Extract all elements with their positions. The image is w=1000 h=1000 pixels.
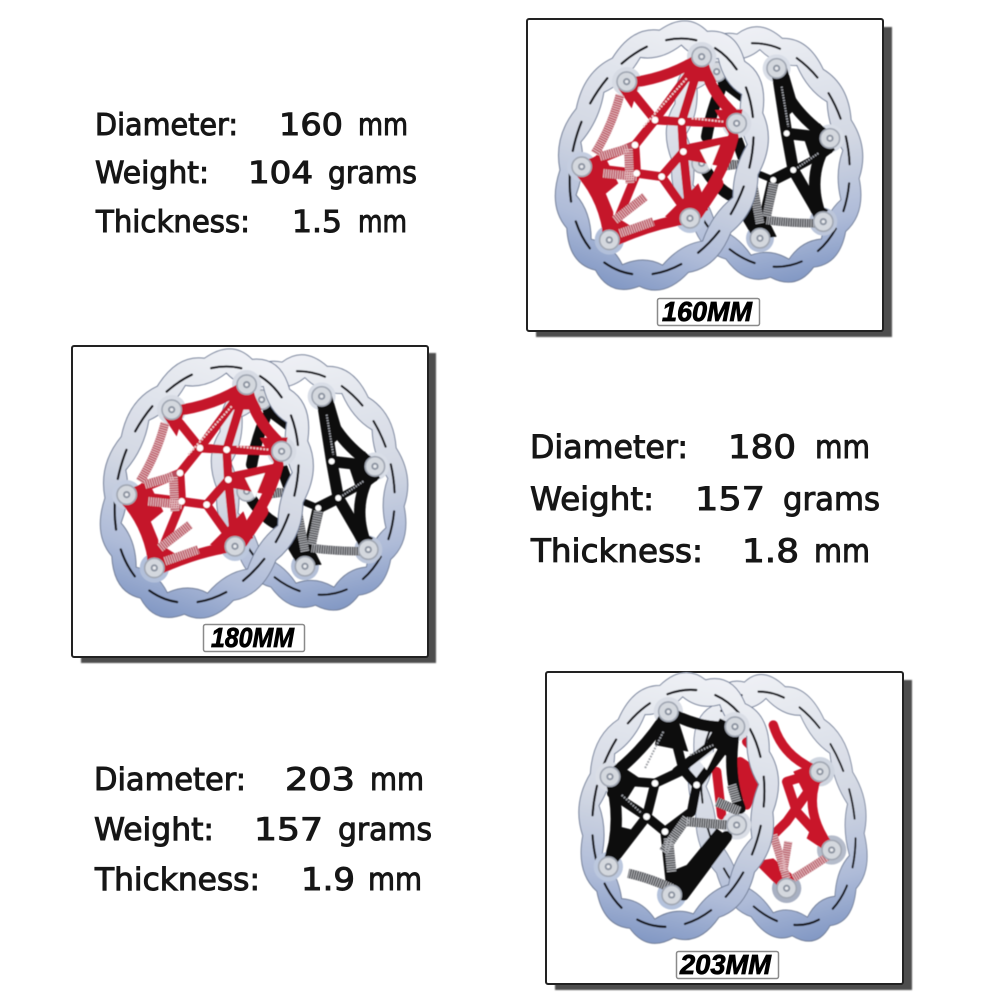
size label: 203MM: 203MM: [679, 949, 772, 980]
spec line: thickness 1.9 mm: [94, 862, 422, 898]
spec line: thickness 1.5 mm: mm: [358, 205, 407, 240]
spec line: diameter 160 mm: 160: [279, 108, 343, 143]
spec line: thickness 1.8 mm: 1.8: [742, 532, 799, 570]
spec line: weight 104 grams: 104: [248, 156, 313, 191]
spec line: thickness 1.8 mm: [530, 532, 870, 570]
image: black and red 203 mm rotor pair: [554, 656, 896, 963]
spec line: diameter 160 mm: Diameter:: [95, 108, 238, 143]
size label: 180MM: 180MM: [211, 622, 295, 653]
size label: 160MM: 160MM: [662, 296, 753, 327]
spec line: thickness 1.9 mm: Thickness:: [94, 862, 260, 898]
spec line: weight 104 grams: grams: [328, 156, 417, 191]
spec line: diameter 203 mm: [94, 762, 424, 798]
spec line: diameter 160 mm: mm: [358, 108, 408, 143]
image: red and black 180 mm rotor pair: [63, 321, 433, 651]
spec block: 160 mm: [95, 108, 417, 240]
spec line: weight 157 grams: grams: [338, 812, 432, 848]
spec line: thickness 1.8 mm: mm: [814, 532, 870, 570]
image: red and black 160 mm rotor pair: [518, 0, 888, 323]
spec line: diameter 180 mm: mm: [815, 428, 870, 466]
panel: 160 mm rotors: [518, 0, 892, 337]
spec line: weight 157 grams: 157: [254, 812, 323, 848]
spec line: thickness 1.5 mm: Thickness:: [95, 205, 250, 240]
spec line: weight 157 grams: Weight:: [94, 812, 214, 848]
panel: 180 mm rotors: [63, 321, 436, 663]
spec line: weight 104 grams: Weight:: [95, 156, 209, 191]
spec line: diameter 203 mm: 203: [285, 762, 355, 798]
spec line: weight 157 grams: Weight:: [530, 480, 654, 518]
spec line: diameter 203 mm: Diameter:: [94, 762, 246, 798]
spec block: 203 mm: [94, 762, 432, 898]
spec line: thickness 1.9 mm: 1.9: [301, 862, 355, 898]
spec line: thickness 1.8 mm: Thickness:: [530, 532, 703, 570]
spec line: weight 157 grams: [530, 480, 880, 518]
spec line: thickness 1.5 mm: 1.5: [292, 205, 342, 240]
spec line: weight 157 grams: [94, 812, 432, 848]
spec line: thickness 1.9 mm: mm: [368, 862, 422, 898]
spec line: diameter 160 mm: [95, 108, 408, 143]
spec line: thickness 1.5 mm: [95, 205, 407, 240]
spec line: weight 157 grams: grams: [783, 480, 880, 518]
spec line: weight 104 grams: [95, 156, 417, 191]
spec line: diameter 180 mm: [530, 428, 870, 466]
spec line: diameter 203 mm: mm: [370, 762, 424, 798]
panel: 203 mm rotors: [546, 656, 912, 990]
spec line: diameter 180 mm: Diameter:: [530, 428, 688, 466]
spec line: weight 157 grams: 157: [695, 480, 765, 518]
spec line: diameter 180 mm: 180: [728, 428, 796, 466]
spec block: 180 mm: [530, 428, 880, 570]
